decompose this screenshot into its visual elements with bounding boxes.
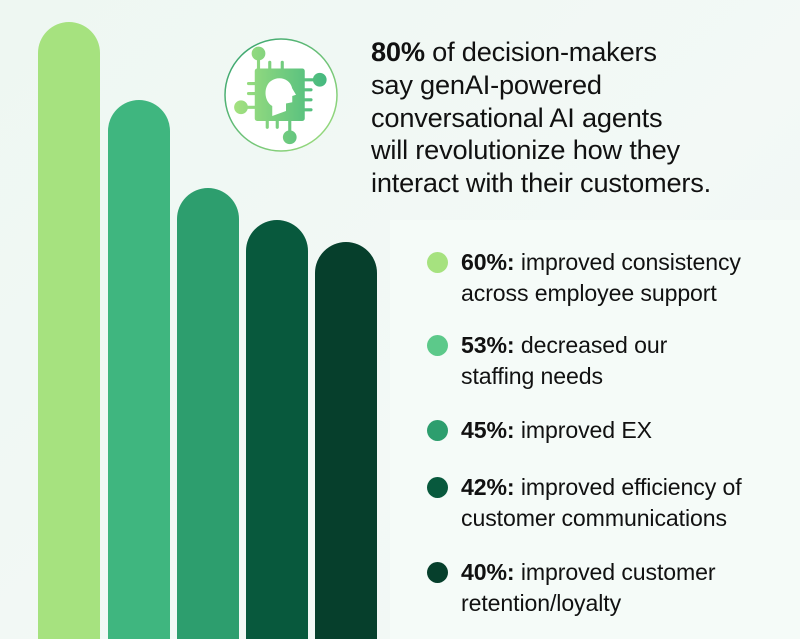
list item 40%: 40%: improved customer: [461, 559, 716, 585]
headline text: [371, 36, 711, 198]
list item 42%: customer communications: [461, 504, 727, 530]
list item 40%: [427, 559, 716, 616]
headline text: will revolutionize how they: [371, 134, 680, 165]
headline text: 80% of decision-makers: [371, 36, 657, 67]
list item 60%: [427, 249, 741, 306]
bar 1: [38, 22, 100, 639]
bar 2: [108, 100, 170, 639]
list item 53%: [427, 332, 667, 389]
headline text: say genAI-powered: [371, 69, 602, 100]
list item 53%: staffing needs: [461, 362, 603, 388]
icon: AI chip head: [224, 38, 338, 152]
bar 5: [315, 242, 377, 639]
list item 60%: 60%: improved consistency: [461, 249, 741, 275]
list item 40%: retention/loyalty: [461, 590, 621, 616]
bar 3: [177, 188, 239, 639]
headline text: interact with their customers.: [371, 167, 711, 198]
list item 45%: 45%: improved EX: [461, 417, 652, 443]
list item 42%: 42%: improved efficiency of: [461, 474, 742, 500]
list item 60%: across employee support: [461, 280, 717, 306]
headline text: conversational AI agents: [371, 102, 662, 133]
bar 4: [246, 220, 308, 639]
list item 53%: 53%: decreased our: [461, 332, 667, 358]
list item 42%: [427, 474, 742, 530]
